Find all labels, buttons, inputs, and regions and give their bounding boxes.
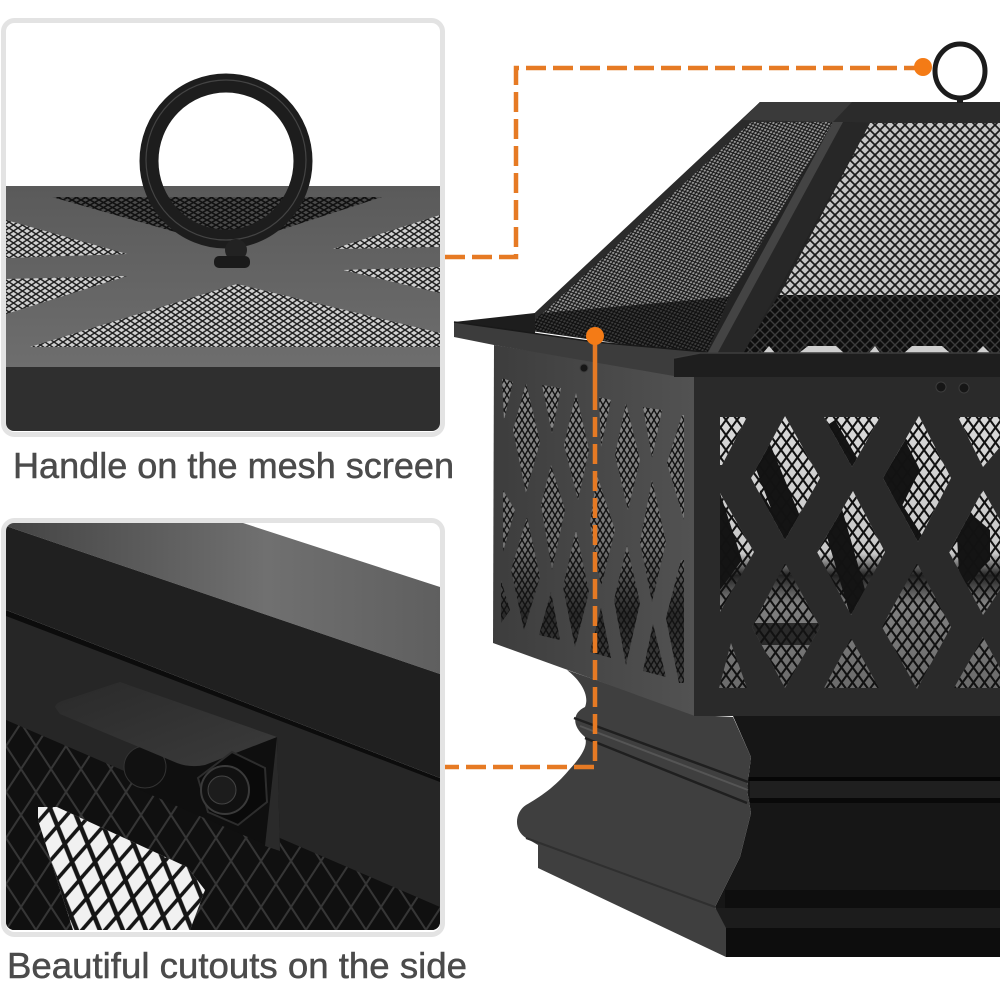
body side face: [493, 345, 695, 716]
panel: cutouts detail: [4, 520, 442, 934]
plate front edge: [6, 367, 440, 431]
callout: cutouts leader line: [445, 327, 604, 767]
rim front band: [6, 526, 440, 778]
fire pit product: [454, 44, 1000, 957]
base: [517, 670, 1000, 957]
icon: top ring: [935, 44, 985, 103]
hood backing: [524, 102, 1000, 356]
rim flange: [454, 313, 1000, 377]
bracket with bolts: [70, 690, 280, 851]
hood right mesh: [742, 123, 1000, 353]
front lattice cutouts: [715, 415, 1000, 690]
screws: [580, 364, 969, 393]
caption: cutouts: Beautiful cutouts on the side: [7, 945, 467, 986]
front mesh cutout: [30, 284, 440, 347]
mesh plate top surface: [6, 186, 440, 368]
callout: handle leader line: [445, 58, 932, 257]
callout dot: handle: [914, 58, 932, 76]
side mesh cutouts: [6, 215, 440, 314]
panel: handle detail: [4, 20, 442, 434]
mesh area: [6, 720, 440, 930]
base side: [517, 670, 751, 957]
base front: [715, 716, 1000, 957]
callout dot: cutouts: [586, 327, 604, 345]
side lattice cutouts: [501, 378, 684, 683]
hood left mesh: [529, 122, 833, 356]
body side panel: [6, 612, 440, 930]
rim top face: [6, 523, 440, 674]
caption: handle: Handle on the mesh screen: [13, 445, 454, 486]
icon: hex nut: [198, 752, 267, 825]
hood frame: [524, 102, 1000, 356]
bright opening behind mesh: [38, 807, 205, 930]
icon: ring handle: [146, 80, 306, 268]
body front face: [694, 377, 1000, 716]
upper mesh cutout: [53, 197, 382, 232]
